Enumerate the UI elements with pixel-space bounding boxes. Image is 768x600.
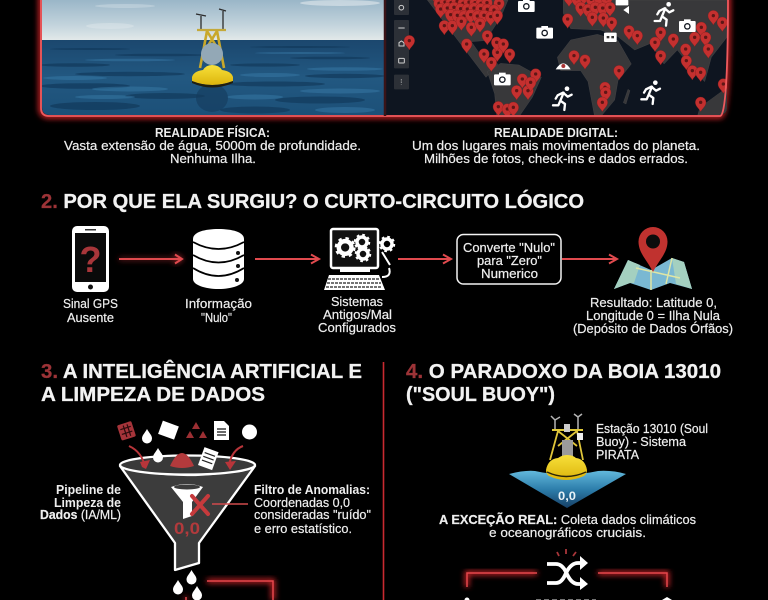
box: converts null to numeric zero: Numerico <box>481 267 538 281</box>
text: misconfigured legacy systems: Configurados <box>318 321 396 335</box>
divider between sections 3 and 4 <box>382 362 384 600</box>
text block: digital reality: Um dos lugares mais movimentados do planeta. <box>412 139 700 153</box>
text block: physical reality: REALIDADE FÍSICA: <box>155 125 270 140</box>
text: cleaning pipeline label: Dados (IA/ML) <box>40 508 121 522</box>
white activity icons <box>494 0 696 110</box>
text block: digital reality <box>412 126 700 166</box>
icons: incoming data items <box>117 421 257 444</box>
text: result latitude and longitude zero: Resultado: Latitude 0, <box>590 296 717 310</box>
connector: filter to anomalies text <box>212 503 248 505</box>
arrow: systems to conversion <box>398 254 451 264</box>
heading: section 3 <box>41 359 362 406</box>
icon: paradox crossing arrows <box>547 549 588 590</box>
inner filter symbol <box>171 484 203 519</box>
text block: physical reality: Vasta extensão de água, 5000m de profundidade. <box>64 139 361 153</box>
text: the real exception: A EXCEÇÃO REAL: Coleta dados climáticos <box>439 512 696 527</box>
arrow: conversion to result <box>562 254 617 264</box>
photo: buoy in the open ocean <box>40 0 385 115</box>
text: result latitude and longitude zero <box>573 296 733 336</box>
text: result latitude and longitude zero: (Depósito de Dados Órfãos) <box>573 321 733 336</box>
text: anomaly filter: consideradas "ruído" <box>254 508 371 522</box>
icon: database <box>193 229 244 289</box>
text: misconfigured legacy systems: Sistemas <box>331 295 383 309</box>
panel: physical and digital reality comparison <box>40 0 729 118</box>
icon: legacy computer with gears <box>324 229 394 290</box>
text: cleaning pipeline label <box>40 483 121 522</box>
water wedge <box>509 471 626 508</box>
text block: physical reality <box>64 125 361 166</box>
box: converts null to numeric zero: para "Zero" <box>477 254 542 268</box>
heading: section 3: A LIMPEZA DE DADOS <box>41 384 265 406</box>
text: missing GPS signal <box>63 297 118 325</box>
heading: section 3: 3. A INTELIGÊNCIA ARTIFICIAL E <box>41 359 362 383</box>
icon: phone without GPS signal: ? <box>80 239 102 280</box>
map pins <box>404 0 729 118</box>
text: anomaly filter: Coordenadas 0,0 <box>254 496 350 510</box>
box: converts null to numeric zero: Converte "Nulo" <box>463 241 555 255</box>
text: cleaning pipeline label: Limpeza de <box>54 496 121 510</box>
illustration: Soul Buoy at 0,0: 0,0 <box>558 489 576 503</box>
arrow: phone to data <box>119 254 182 264</box>
text: null information: Informação <box>185 297 252 311</box>
text: station description <box>596 422 708 462</box>
heading: section 4 <box>406 361 721 406</box>
land masses <box>427 0 727 117</box>
text: anomaly filter: e erro estatístico. <box>254 522 352 536</box>
heading: section 2: 2. POR QUE ELA SURGIU? O CURTO-CIRCUITO LÓGICO <box>41 189 584 213</box>
sea waves <box>40 46 385 114</box>
bracket: paradox branches <box>467 573 667 587</box>
icon: red X <box>192 496 208 514</box>
text: null information: "Nulo" <box>201 311 232 325</box>
text: anomaly filter <box>254 483 371 536</box>
diagram: data cleaning funnel <box>40 361 721 600</box>
arrow: data to legacy systems <box>255 254 319 264</box>
text: misconfigured legacy systems: Antigos/Mal <box>323 308 392 322</box>
heading: section 4: ("SOUL BUOY") <box>406 384 555 406</box>
text: the real exception: e oceanográficos cruciais. <box>489 526 646 540</box>
icon: phone without GPS signal <box>72 226 109 292</box>
text: station description: Estação 13010 (Soul <box>596 422 708 436</box>
text block: digital reality: Milhões de fotos, check-ins e dados errados. <box>424 152 688 166</box>
icon: funnel <box>120 446 255 570</box>
bracket: funnel output <box>186 581 273 600</box>
heading: section 4: 4. O PARADOXO DA BOIA 13010 <box>406 361 721 383</box>
text: the real exception <box>439 512 696 540</box>
falling items entering the funnel <box>129 446 243 470</box>
flow chart: logic short circuit <box>63 226 733 336</box>
icons: clean data drops <box>173 570 202 600</box>
text: cleaning pipeline label: Pipeline de <box>56 483 121 497</box>
text: missing GPS signal: Ausente <box>67 311 114 325</box>
toolbar <box>394 0 409 90</box>
box: converts null to numeric zero <box>457 234 561 284</box>
map: digital world map with pins <box>384 0 729 118</box>
icon: map with location pin <box>614 227 692 290</box>
text block: digital reality: REALIDADE DIGITAL: <box>494 126 618 140</box>
text: missing GPS signal: Sinal GPS <box>63 297 118 311</box>
text: station description: PIRATA <box>596 448 640 462</box>
text: null information <box>185 297 252 325</box>
text block: physical reality: Nenhuma Ilha. <box>170 152 256 166</box>
icon: buoy <box>546 414 587 480</box>
illustration: Soul Buoy at 0,0 <box>509 414 626 508</box>
icon: yellow buoy <box>192 9 233 88</box>
text: anomaly filter: Filtro de Anomalias: <box>254 483 370 497</box>
text: station description: Buoy) - Sistema <box>596 435 686 449</box>
icon: funnel: 0,0 <box>174 519 200 538</box>
icons: branch tops <box>464 597 672 600</box>
text: result latitude and longitude zero: Longitude 0 = Ilha Nula <box>586 309 720 323</box>
text: misconfigured legacy systems <box>318 295 396 335</box>
